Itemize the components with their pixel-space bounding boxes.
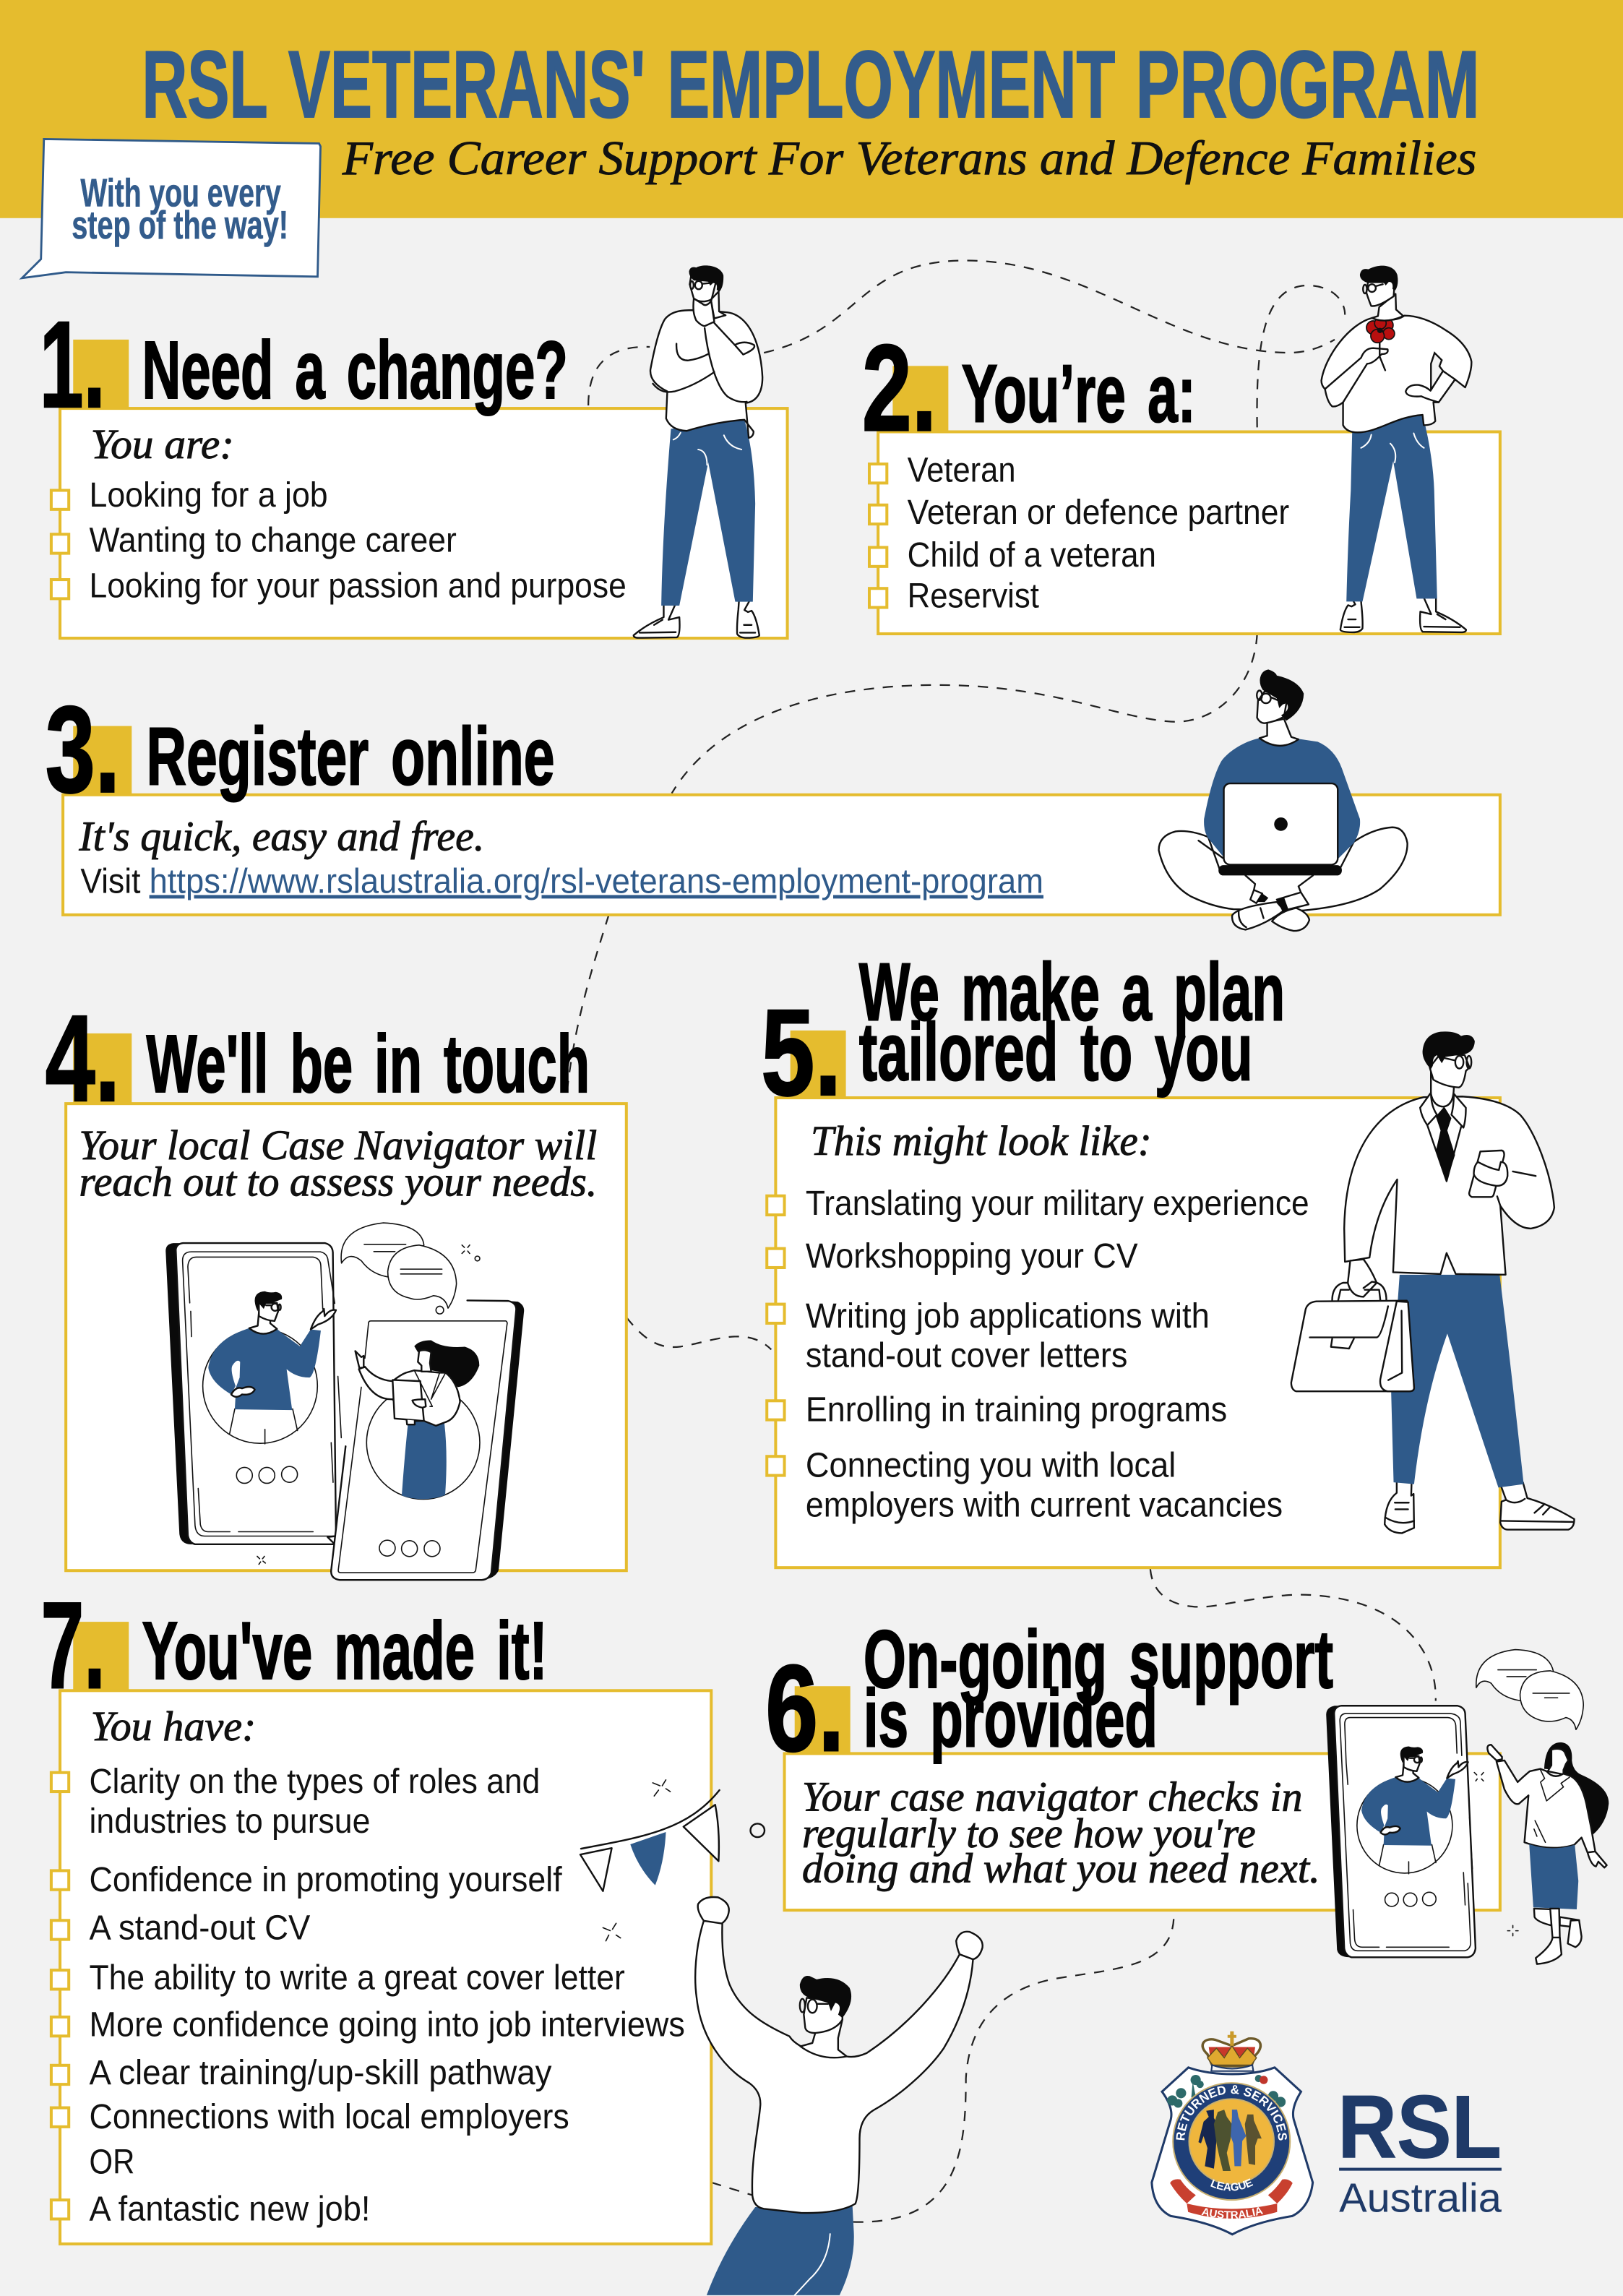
panel 1: need a change: 1. [40,296,106,434]
panel 3: register online: 3. [46,682,120,819]
panel 5: we make a plan: 5. [761,984,842,1122]
panel 6: on-going support: is provided [864,1672,1158,1764]
panel 5: we make a plan: We make a plan [859,947,1285,1039]
panel 5: we make a plan: tailored to you [859,1007,1253,1098]
figure: person with laptop [1159,669,1408,931]
logo: RSL Australia wordmark [1338,2077,1502,2221]
panel 7: you've made it [41,1577,711,2244]
speech bubble tagline [22,139,321,278]
figure: man celebrating [695,1897,983,2295]
header band [0,0,1623,218]
panel 7: you've made it: OR [90,2143,134,2182]
title: RSL [142,31,268,137]
panel 6: on-going support: Your case navigator checks in [802,1773,1302,1820]
illustration: phone and woman [1326,1650,1609,1964]
dashed connector lines [567,261,1436,2222]
logo: RSL shield emblem [1150,2031,1314,2236]
panel 3: register online [46,682,1500,915]
logo: RSL Australia wordmark: RSL [1338,2077,1502,2177]
panel 2: you're a: Reservist [908,577,1039,616]
panel 5: we make a plan: Writing job applications with [806,1297,1210,1336]
panel 1: need a change: Looking for your passion and purpose [90,566,627,605]
panel 5: we make a plan: Workshopping your CV [806,1237,1138,1276]
panel 7: you've made it: Confidence in promoting yourself [90,1860,562,1899]
speech bubble tagline: step of the way! [72,202,288,247]
panel 6: on-going support [765,1614,1500,1910]
logo: RSL shield emblem: AUSTRALIA [1201,2207,1263,2219]
panel 4: we'll be in touch: reach out to assess your needs. [79,1158,597,1205]
panel 7: you've made it: You've made it! [142,1605,547,1697]
panel 7: you've made it: Connections with local employers [90,2097,569,2136]
logo: RSL shield emblem: RETURNED & SERVICES [1176,2085,1287,2141]
panel 7: you've made it: Clarity on the types of roles and [90,1762,540,1801]
speech bubble tagline: With you every [80,171,281,215]
panel 5: we make a plan: stand-out cover letters [806,1336,1127,1375]
panel 6: on-going support: regularly to see how you're [802,1810,1256,1857]
panel 5: we make a plan: Translating your military experience [806,1184,1309,1223]
panel 2: you're a: Child of a veteran [908,536,1156,575]
panel 6: on-going support: 6. [765,1640,845,1777]
panel 7: you've made it: A clear training/up-skill pathway [90,2053,552,2092]
panel 1: need a change: You are: [91,421,234,468]
panel 7: you've made it: 7. [41,1577,106,1714]
panel 2: you're a: 2. [862,319,937,457]
bunting and sparkles [580,1780,765,1941]
panel 7: you've made it: More confidence going into job interviews [90,2005,685,2044]
torso and arms [1322,266,1471,432]
ribbon [1170,2179,1293,2219]
panel 1: need a change: Looking for a job [90,476,328,515]
man on phone screen [1361,1747,1468,1874]
panel 1: need a change: Wanting to change career [90,521,457,560]
figure: businessman with briefcase [1291,1031,1575,1533]
panel 3: register online: https://www.rslaustralia.org/rsl-veterans-employment-program [150,861,1043,900]
panel 7: you've made it: A fantastic new job! [90,2189,370,2228]
panel 6: on-going support: doing and what you need next. [802,1845,1320,1892]
panel 7: you've made it: A stand-out CV [90,1909,311,1948]
panel 3: register online: Visit [80,861,141,900]
panel 7: you've made it: You have: [91,1703,256,1750]
panel 4: we'll be in touch: We'll be in touch [147,1018,590,1110]
shoes of man with poppy [1340,593,1466,632]
title: PROGRAM [1136,31,1480,137]
panel 5: we make a plan: Connecting you with local [806,1446,1176,1485]
floral emblems [1167,2075,1286,2108]
panel 5: we make a plan: employers with current vacancies [806,1485,1283,1524]
panel 4: we'll be in touch: Your local Case Navigator will [79,1122,597,1169]
logo: RSL shield emblem: LEAGUE [1210,2178,1253,2191]
figure: man with poppy [1322,266,1471,632]
panel 2: you're a: Veteran or defence partner [908,493,1289,532]
panel 2: you're a: You’re a: [962,348,1196,439]
panel 1: need a change [40,296,788,638]
panel 6: on-going support: On-going support [864,1614,1333,1706]
panel 5: we make a plan [761,947,1500,1568]
subtitle: Free Career Support For Veterans and Defence Families [342,132,1476,185]
panel 2: you're a [862,319,1500,634]
panel 3: register online: It's quick, easy and free. [78,813,484,860]
panel 7: you've made it: industries to pursue [90,1802,370,1841]
title [142,31,1480,137]
panel 4: we'll be in touch: 4. [46,990,120,1127]
panel 5: we make a plan: Enrolling in training programs [806,1390,1227,1429]
panel 5: we make a plan: This might look like: [811,1117,1152,1164]
panel 4: we'll be in touch [46,990,627,1570]
crown [1202,2031,1260,2071]
soldiers [1198,2110,1262,2171]
panel 1: need a change: Need a change? [142,324,568,416]
figure: man thinking [634,265,762,638]
panel 2: you're a: Veteran [908,450,1016,489]
logo: RSL Australia wordmark: Australia [1339,2175,1502,2221]
title: EMPLOYMENT [668,31,1115,137]
illustration: two phones video call [165,1223,524,1580]
panel 7: you've made it: The ability to write a great cover letter [90,1958,625,1997]
title: VETERANS' [288,31,645,137]
panel 3: register online: Register online [147,711,555,803]
